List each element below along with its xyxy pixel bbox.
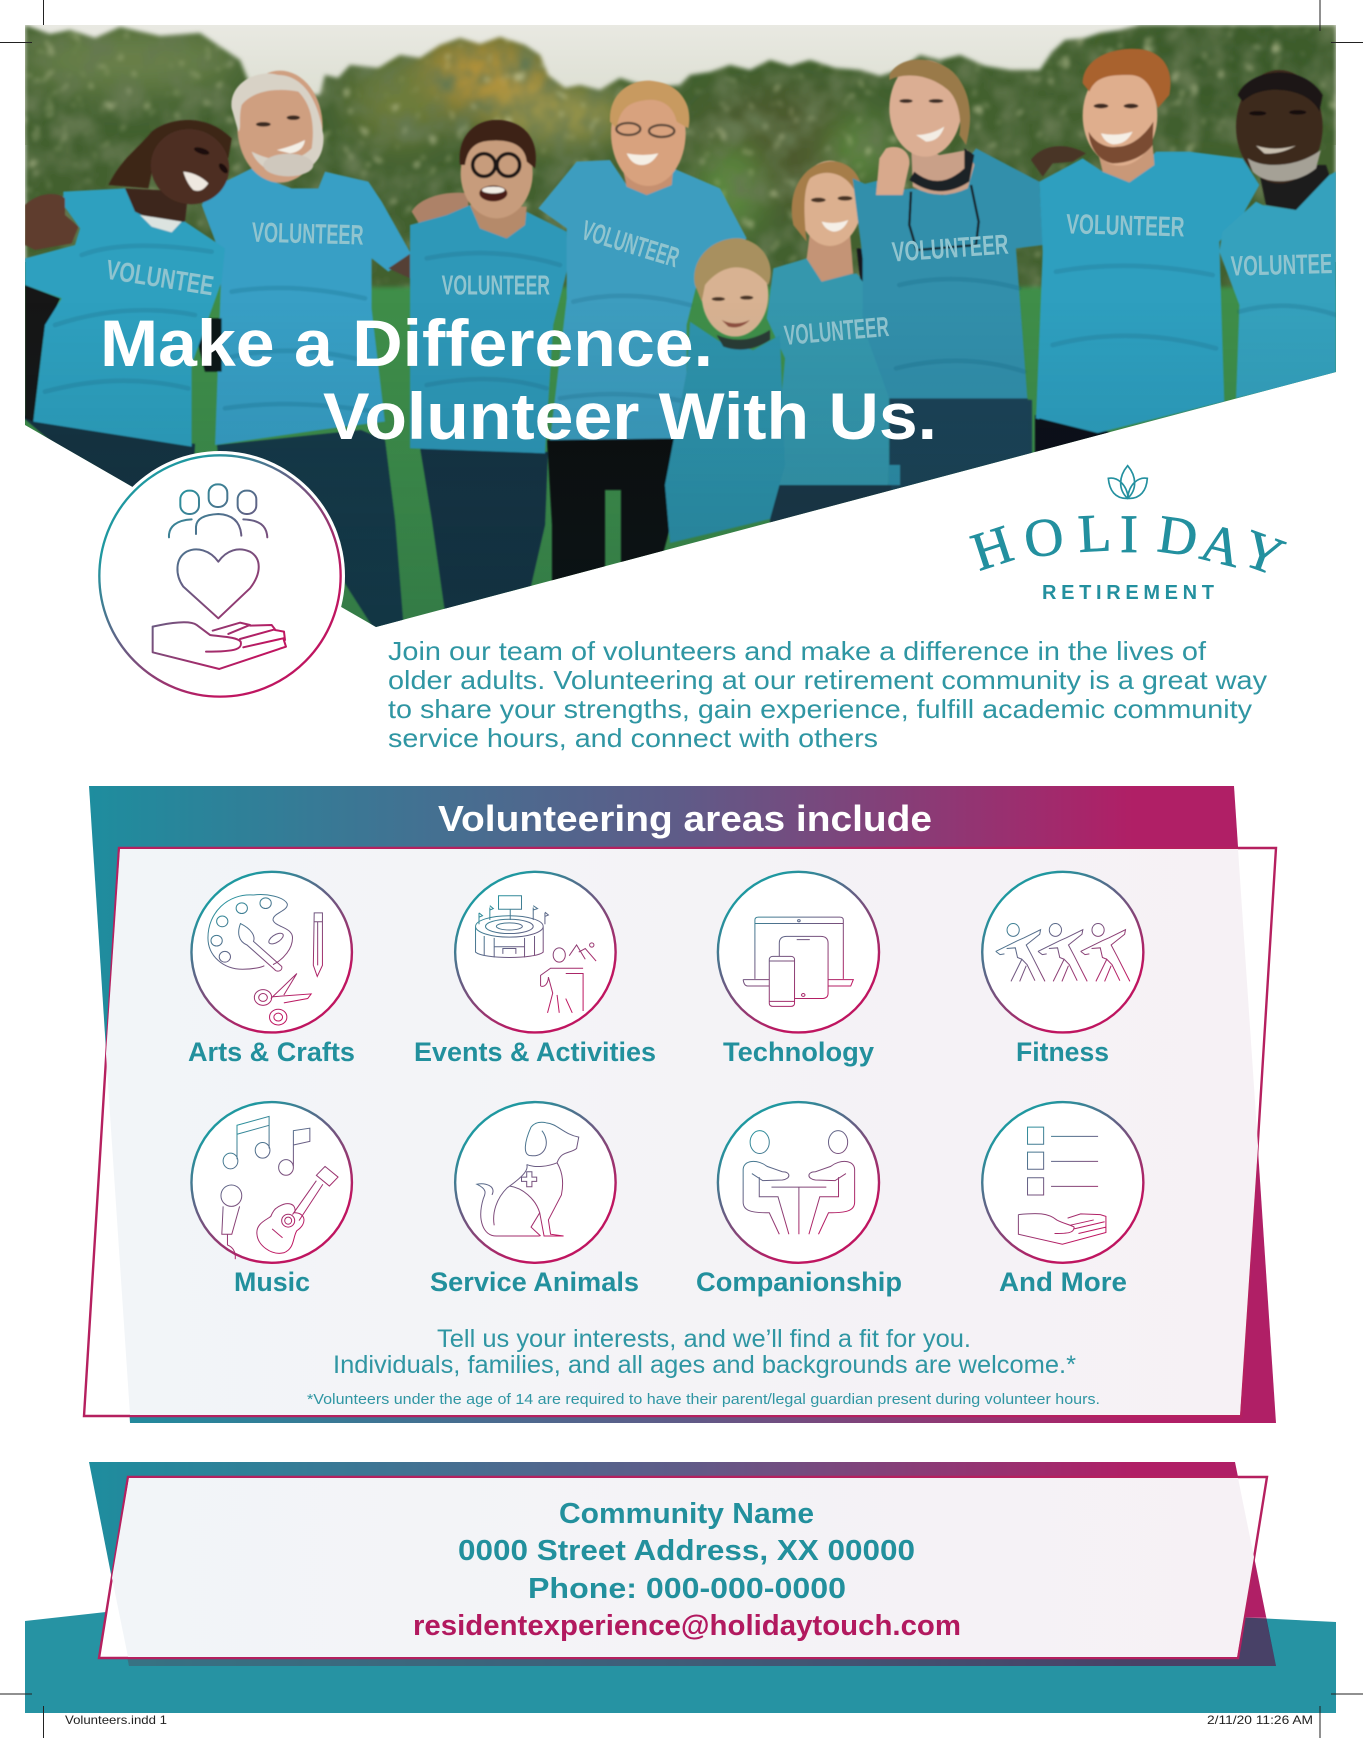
title: Make a Difference. <box>100 306 713 380</box>
label: technology: Technology <box>723 1037 874 1067</box>
shirt lettering, centre: VOLUNTEER <box>578 214 683 273</box>
print slug: date and time: 2/11/20 11:26 AM <box>1207 1713 1313 1727</box>
shirt lettering, right: VOLUNTEER <box>891 229 1009 268</box>
intro paragraph <box>388 636 1267 753</box>
icon: checklist and hand <box>982 1102 1143 1263</box>
panel backing gradient <box>89 786 1276 1423</box>
email: residentexperience@holidaytouch.com <box>413 1610 961 1642</box>
panel: volunteering areas <box>84 786 1276 1423</box>
footnote: *Volunteers under the age of 14 are required to have their parent/legal guardian present during volunteer hours. <box>307 1391 1100 1408</box>
note: interests: Individuals, families, and all ages and backgrounds are welcome.* <box>333 1351 1076 1379</box>
phone: Phone: 000-000-0000 <box>528 1573 846 1605</box>
contact pale interior <box>112 1478 1254 1657</box>
label: fitness: Fitness <box>1016 1037 1109 1067</box>
shirt lettering, centre: VOLUNTEER <box>783 311 890 351</box>
shirt lettering, right <box>891 208 1333 282</box>
shirt lettering: VOLUNTEER <box>252 217 364 251</box>
icon: volunteers heart in hand badge <box>95 451 345 701</box>
icon: service animals <box>455 1102 616 1263</box>
shirt lettering, centre: VOLUNTEER <box>442 269 550 300</box>
volunteers on the left <box>25 71 468 447</box>
contact front frame <box>99 1477 1267 1658</box>
logo: Holiday Retirement: RETIREMENT <box>1042 582 1214 604</box>
icon: arts and crafts <box>191 872 352 1032</box>
title <box>100 306 937 453</box>
volunteers in the centre <box>410 81 900 543</box>
shirt lettering: VOLUNTEE <box>104 254 216 301</box>
intro paragraph: service hours, and connect with others <box>388 723 878 753</box>
icon: technology <box>718 872 879 1032</box>
shirt lettering, centre <box>442 214 890 351</box>
community name: Community Name <box>559 1498 814 1530</box>
icon: companionship <box>718 1102 879 1263</box>
icon: music <box>191 1102 352 1263</box>
note: interests <box>333 1325 1076 1379</box>
logo: Holiday Retirement <box>964 466 1292 604</box>
label: and more: And More <box>999 1267 1127 1297</box>
intro paragraph: to share your strengths, gain experience, fulfill academic community <box>388 694 1252 724</box>
panel: contact <box>25 1462 1336 1713</box>
logo: Holiday Retirement: HOLIDAY <box>964 502 1292 588</box>
print slug: file name: Volunteers.indd 1 <box>65 1713 167 1727</box>
note: interests: Tell us your interests, and we’ll find a fit for you. <box>437 1325 971 1353</box>
title: Volunteer With Us. <box>323 379 937 453</box>
label: music: Music <box>234 1267 310 1297</box>
volunteers on the right <box>853 49 1336 465</box>
panel pale interior <box>106 849 1258 1415</box>
shirt lettering, right: VOLUNTEER <box>1066 208 1185 242</box>
panel front frame <box>84 848 1276 1416</box>
lightened overlap of band and backing <box>119 1617 1276 1666</box>
label: arts and crafts: Arts & Crafts <box>188 1037 355 1067</box>
hero photo: volunteers in blue shirts <box>20 20 1350 652</box>
intro paragraph: older adults. Volunteering at our retirement community is a great way <box>388 665 1267 695</box>
shirt lettering <box>104 217 364 301</box>
street address: 0000 Street Address, XX 00000 <box>458 1535 915 1567</box>
bottom teal band <box>25 1612 1336 1713</box>
intro paragraph: Join our team of volunteers and make a difference in the lives of <box>388 636 1207 666</box>
contact backing gradient <box>89 1462 1276 1666</box>
icon: fitness <box>982 872 1143 1032</box>
panel heading: Volunteering areas include <box>438 798 932 839</box>
label: companionship: Companionship <box>696 1267 902 1297</box>
jeans and dark trousers <box>20 390 1110 632</box>
icon: events and activities <box>455 872 616 1032</box>
label: service animals: Service Animals <box>430 1267 639 1297</box>
label: events and activities: Events & Activities <box>414 1037 656 1067</box>
